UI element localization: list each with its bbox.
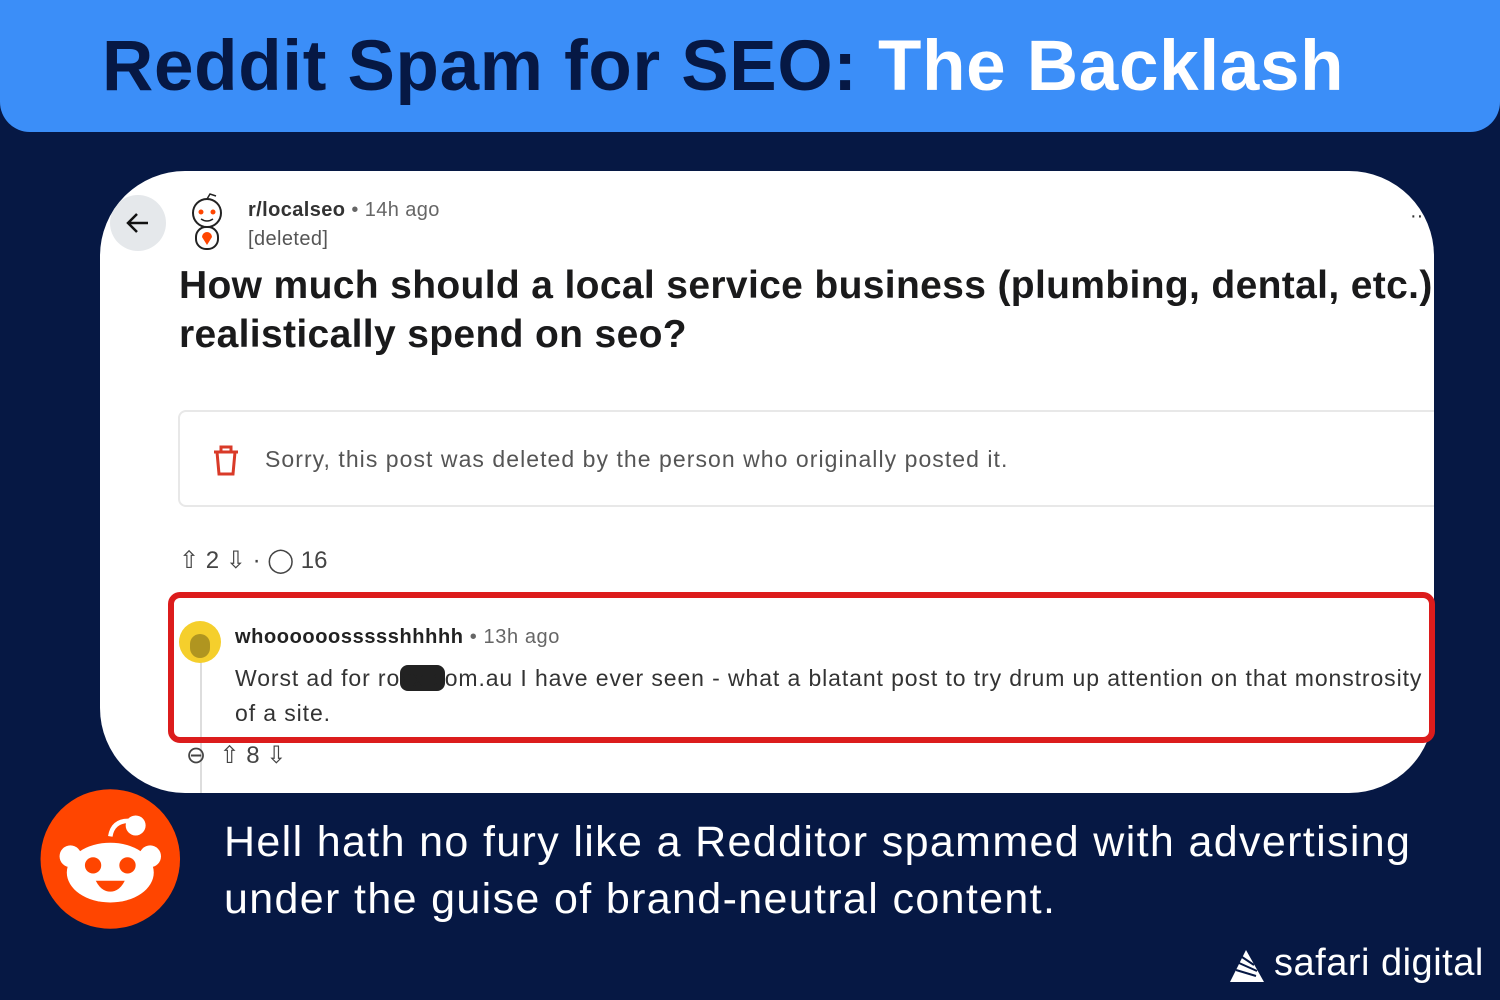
panel: reddit screenshot card (100, 171, 1434, 793)
logo: safari digital: safari digital (1274, 942, 1484, 984)
comment actions: ⊖ ⇧ 8 ⇩ (186, 742, 286, 769)
post meta: [deleted] (248, 228, 328, 250)
vote bar: ⇧ 2 ⇩ · ◯ 16 (179, 547, 327, 574)
header band (0, 0, 1500, 132)
comment text: of a site. (235, 700, 331, 726)
icon: subreddit avatar (192, 193, 222, 250)
deleted text: Sorry, this post was deleted by the person who originally posted it. (265, 446, 1008, 472)
post meta: r/localseo • 14h ago (248, 199, 440, 221)
icon: back arrow (110, 195, 166, 251)
dots: ·· (1410, 205, 1423, 227)
post title: realistically spend on seo? (179, 313, 687, 356)
title: Reddit Spam for SEO: The Backlash (102, 27, 1344, 106)
icon: reddit logo (40, 789, 180, 929)
comment text: Worst ad for roxx.com.au I have ever seen - what a blatant post to try drum up attention on that monstrosity (235, 665, 1422, 691)
caption text: Hell hath no fury like a Redditor spammed with advertising (224, 818, 1411, 866)
deleted notice box (178, 410, 1478, 507)
caption text: under the guise of brand-neutral content. (224, 875, 1056, 923)
icon: trash (214, 446, 238, 476)
post title: How much should a local service business (plumbing, dental, etc.) (179, 264, 1433, 307)
callout: red highlight box (168, 592, 1435, 743)
caption text (224, 818, 1411, 923)
comment author: whoooooossssshhhhh • 13h ago (235, 626, 560, 648)
post meta (248, 199, 440, 250)
post title (179, 264, 1433, 356)
icon: comment avatar (179, 621, 221, 663)
comment text (235, 665, 1422, 726)
comment line (200, 661, 202, 801)
